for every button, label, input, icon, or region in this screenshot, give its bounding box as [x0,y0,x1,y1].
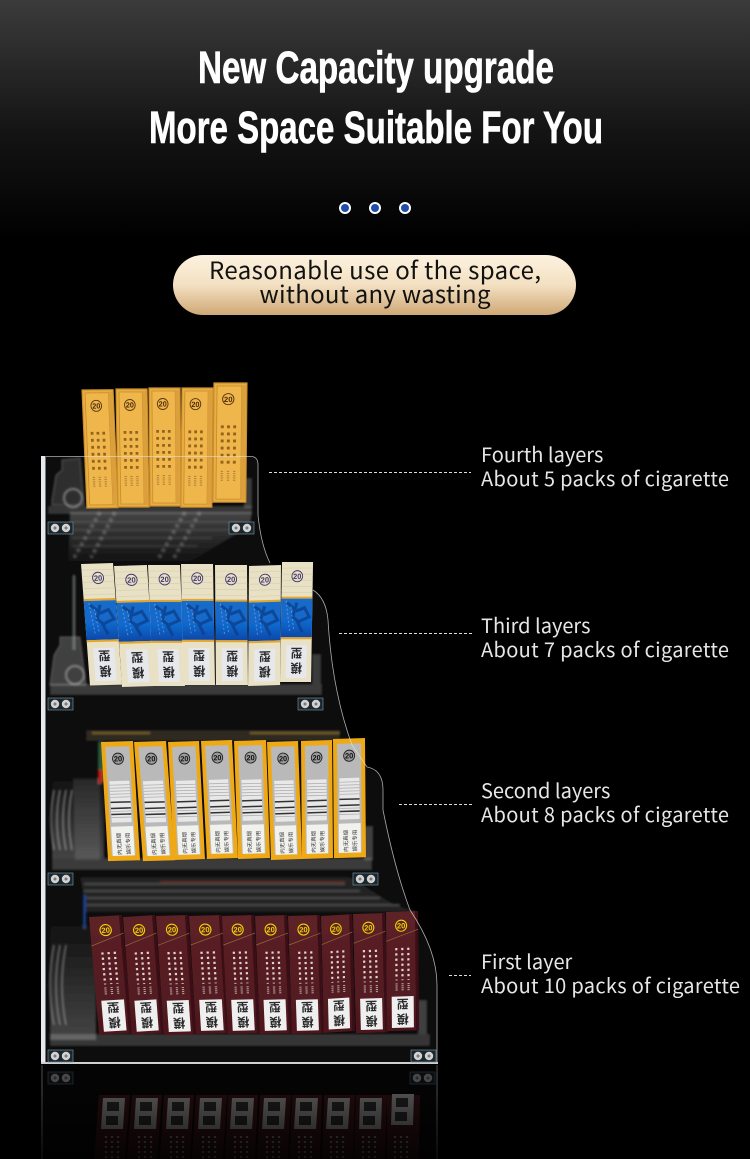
first layer cigarette packs: 20 [233,925,242,934]
second layer cigarette packs: 内无真烟 [342,830,350,852]
first layer cigarette packs: 20 [101,926,110,935]
label: fourth layer [269,439,729,492]
label: fourth layer: Fourth layers [481,439,603,468]
label: third layer: Third layers [481,610,590,639]
mounting bolts [48,522,436,1062]
third layer cigarette packs: 型 [130,648,144,667]
third layer cigarette packs [81,562,313,687]
third layer cigarette packs: 20 [127,576,136,585]
first layer cigarette packs: 模 [269,1013,282,1031]
fourth layer cigarette packs: 20 [126,401,134,410]
first layer cigarette packs: 模 [237,1013,250,1031]
second layer cigarette packs: 20 [345,751,353,761]
second layer cigarette packs: 娱乐专用 [318,831,326,852]
first layer cigarette packs: 型 [204,998,218,1016]
first layer cigarette packs: 20 [364,923,373,933]
second layer cigarette packs: 娱乐专用 [222,831,231,852]
third layer cigarette packs: 模 [163,663,175,681]
subtitle pill: without any wasting [260,275,491,310]
third layer cigarette packs: 20 [261,575,269,585]
third layer cigarette packs: 模 [226,663,238,680]
second layer cigarette packs: 内无真烟 [309,831,317,853]
first layer cigarette packs: 型 [365,997,377,1015]
second layer cigarette packs: 20 [147,754,156,764]
first layer cigarette packs: 20 [266,925,275,934]
third tier supports [50,575,322,695]
second layer cigarette packs: 内无真烟 [213,831,222,853]
title: More Space Suitable For You [149,102,603,153]
first layer cigarette packs: 型 [106,999,120,1017]
fourth layer cigarette packs [82,383,247,508]
third layer cigarette packs: 型 [226,647,238,665]
first layer cigarette packs: 型 [268,998,281,1016]
third layer cigarette packs: 型 [98,647,111,665]
fourth layer cigarette packs: 20 [224,395,233,404]
acrylic rack [41,383,438,1064]
title [149,42,603,153]
second layer cigarette packs: 娱乐专用 [158,833,167,855]
label: third layer [339,610,729,663]
third layer cigarette packs: 型 [259,648,271,665]
second layer cigarette packs: 娱乐专用 [123,833,133,855]
first layer cigarette packs: 型 [139,999,153,1016]
second layer cigarette packs: 内无真烟 [245,831,254,853]
second layer cigarette packs: 20 [213,753,222,762]
second layer cigarette packs: 娱乐专用 [351,830,359,852]
third layer cigarette packs: 20 [293,572,301,581]
third layer cigarette packs: 模 [131,664,145,682]
first layer cigarette packs: 模 [301,1013,314,1031]
second layer cigarette packs: 20 [313,753,321,762]
second layer cigarette packs: 内无真烟 [278,832,286,854]
third layer cigarette packs: 20 [193,574,201,583]
first layer cigarette packs: 型 [333,997,345,1015]
rack base edge [41,1062,438,1064]
first layer cigarette packs: 模 [397,1010,409,1028]
first layer cigarette packs: 模 [173,1014,186,1032]
label: first layer: First layer [481,946,573,975]
fourth layer cigarette packs: 20 [191,400,200,409]
third layer cigarette packs: 型 [290,644,302,662]
first layer cigarette packs: 型 [236,998,249,1016]
label: first layer [449,946,740,999]
second layer cigarette packs: 20 [114,754,122,764]
first layer cigarette packs: 型 [301,998,313,1016]
second layer cigarette packs: 内无真烟 [180,832,189,854]
subtitle pill [173,251,576,315]
first layer cigarette packs: 模 [205,1013,219,1031]
second tier supports [51,730,373,870]
rack side outline [46,456,437,1063]
third layer cigarette packs: 型 [193,647,205,664]
second layer cigarette packs: 20 [279,754,287,763]
second layer cigarette packs: 内无真烟 [114,832,124,855]
label: fourth layer: About 5 packs of cigarette [481,463,729,492]
first layer cigarette packs: 型 [172,999,185,1017]
rack back panel [46,456,437,1063]
second layer cigarette packs: 内无真烟 [149,832,158,855]
rack left edge [41,456,46,1064]
first layer cigarette packs: 模 [365,1012,378,1030]
first tier supports [50,877,430,1046]
first layer cigarette packs: 20 [332,924,340,934]
label: first layer: About 10 packs of cigarette [481,970,740,999]
first layer cigarette packs [89,911,419,1035]
reflection fade [30,1090,450,1159]
fourth layer cigarette packs: 20 [159,400,167,409]
first layer cigarette packs: 20 [299,925,308,934]
first layer cigarette packs: 模 [108,1014,122,1032]
subtitle pill: Reasonable use of the space, [209,251,541,286]
third layer cigarette packs: 模 [193,662,205,680]
first layer cigarette packs: 型 [397,995,409,1013]
reflection of rack [41,1065,438,1159]
second layer cigarette packs: 娱乐专用 [189,832,198,853]
second layer cigarette packs: 20 [180,754,189,763]
third layer cigarette packs: 模 [99,662,112,681]
second layer cigarette packs: 20 [246,753,255,762]
fourth tier supports [48,458,252,562]
second layer cigarette packs: 娱乐专用 [254,831,263,852]
second layer cigarette packs: 娱乐专用 [286,832,295,853]
label: second layer: About 8 packs of cigarette [481,799,729,828]
third layer cigarette packs: 20 [160,575,169,584]
label: second layer [399,775,729,828]
third layer cigarette packs: 模 [290,660,302,677]
first layer cigarette packs: 20 [135,926,144,935]
second layer cigarette packs [101,738,366,861]
background [0,0,750,240]
title: New Capacity upgrade [198,42,554,93]
fourth layer cigarette packs: 20 [92,401,100,411]
third layer cigarette packs: 型 [162,648,175,665]
label: second layer: Second layers [481,775,610,804]
first layer cigarette packs: 20 [397,921,405,931]
third layer cigarette packs: 20 [94,574,103,583]
dots [339,202,411,214]
first layer cigarette packs: 20 [201,925,210,934]
first layer cigarette packs: 模 [140,1014,154,1031]
label: third layer: About 7 packs of cigarette [481,634,729,663]
third layer cigarette packs: 模 [259,663,271,680]
first layer cigarette packs: 20 [167,925,176,935]
first layer cigarette packs: 模 [333,1012,345,1030]
third layer cigarette packs: 20 [227,575,235,584]
